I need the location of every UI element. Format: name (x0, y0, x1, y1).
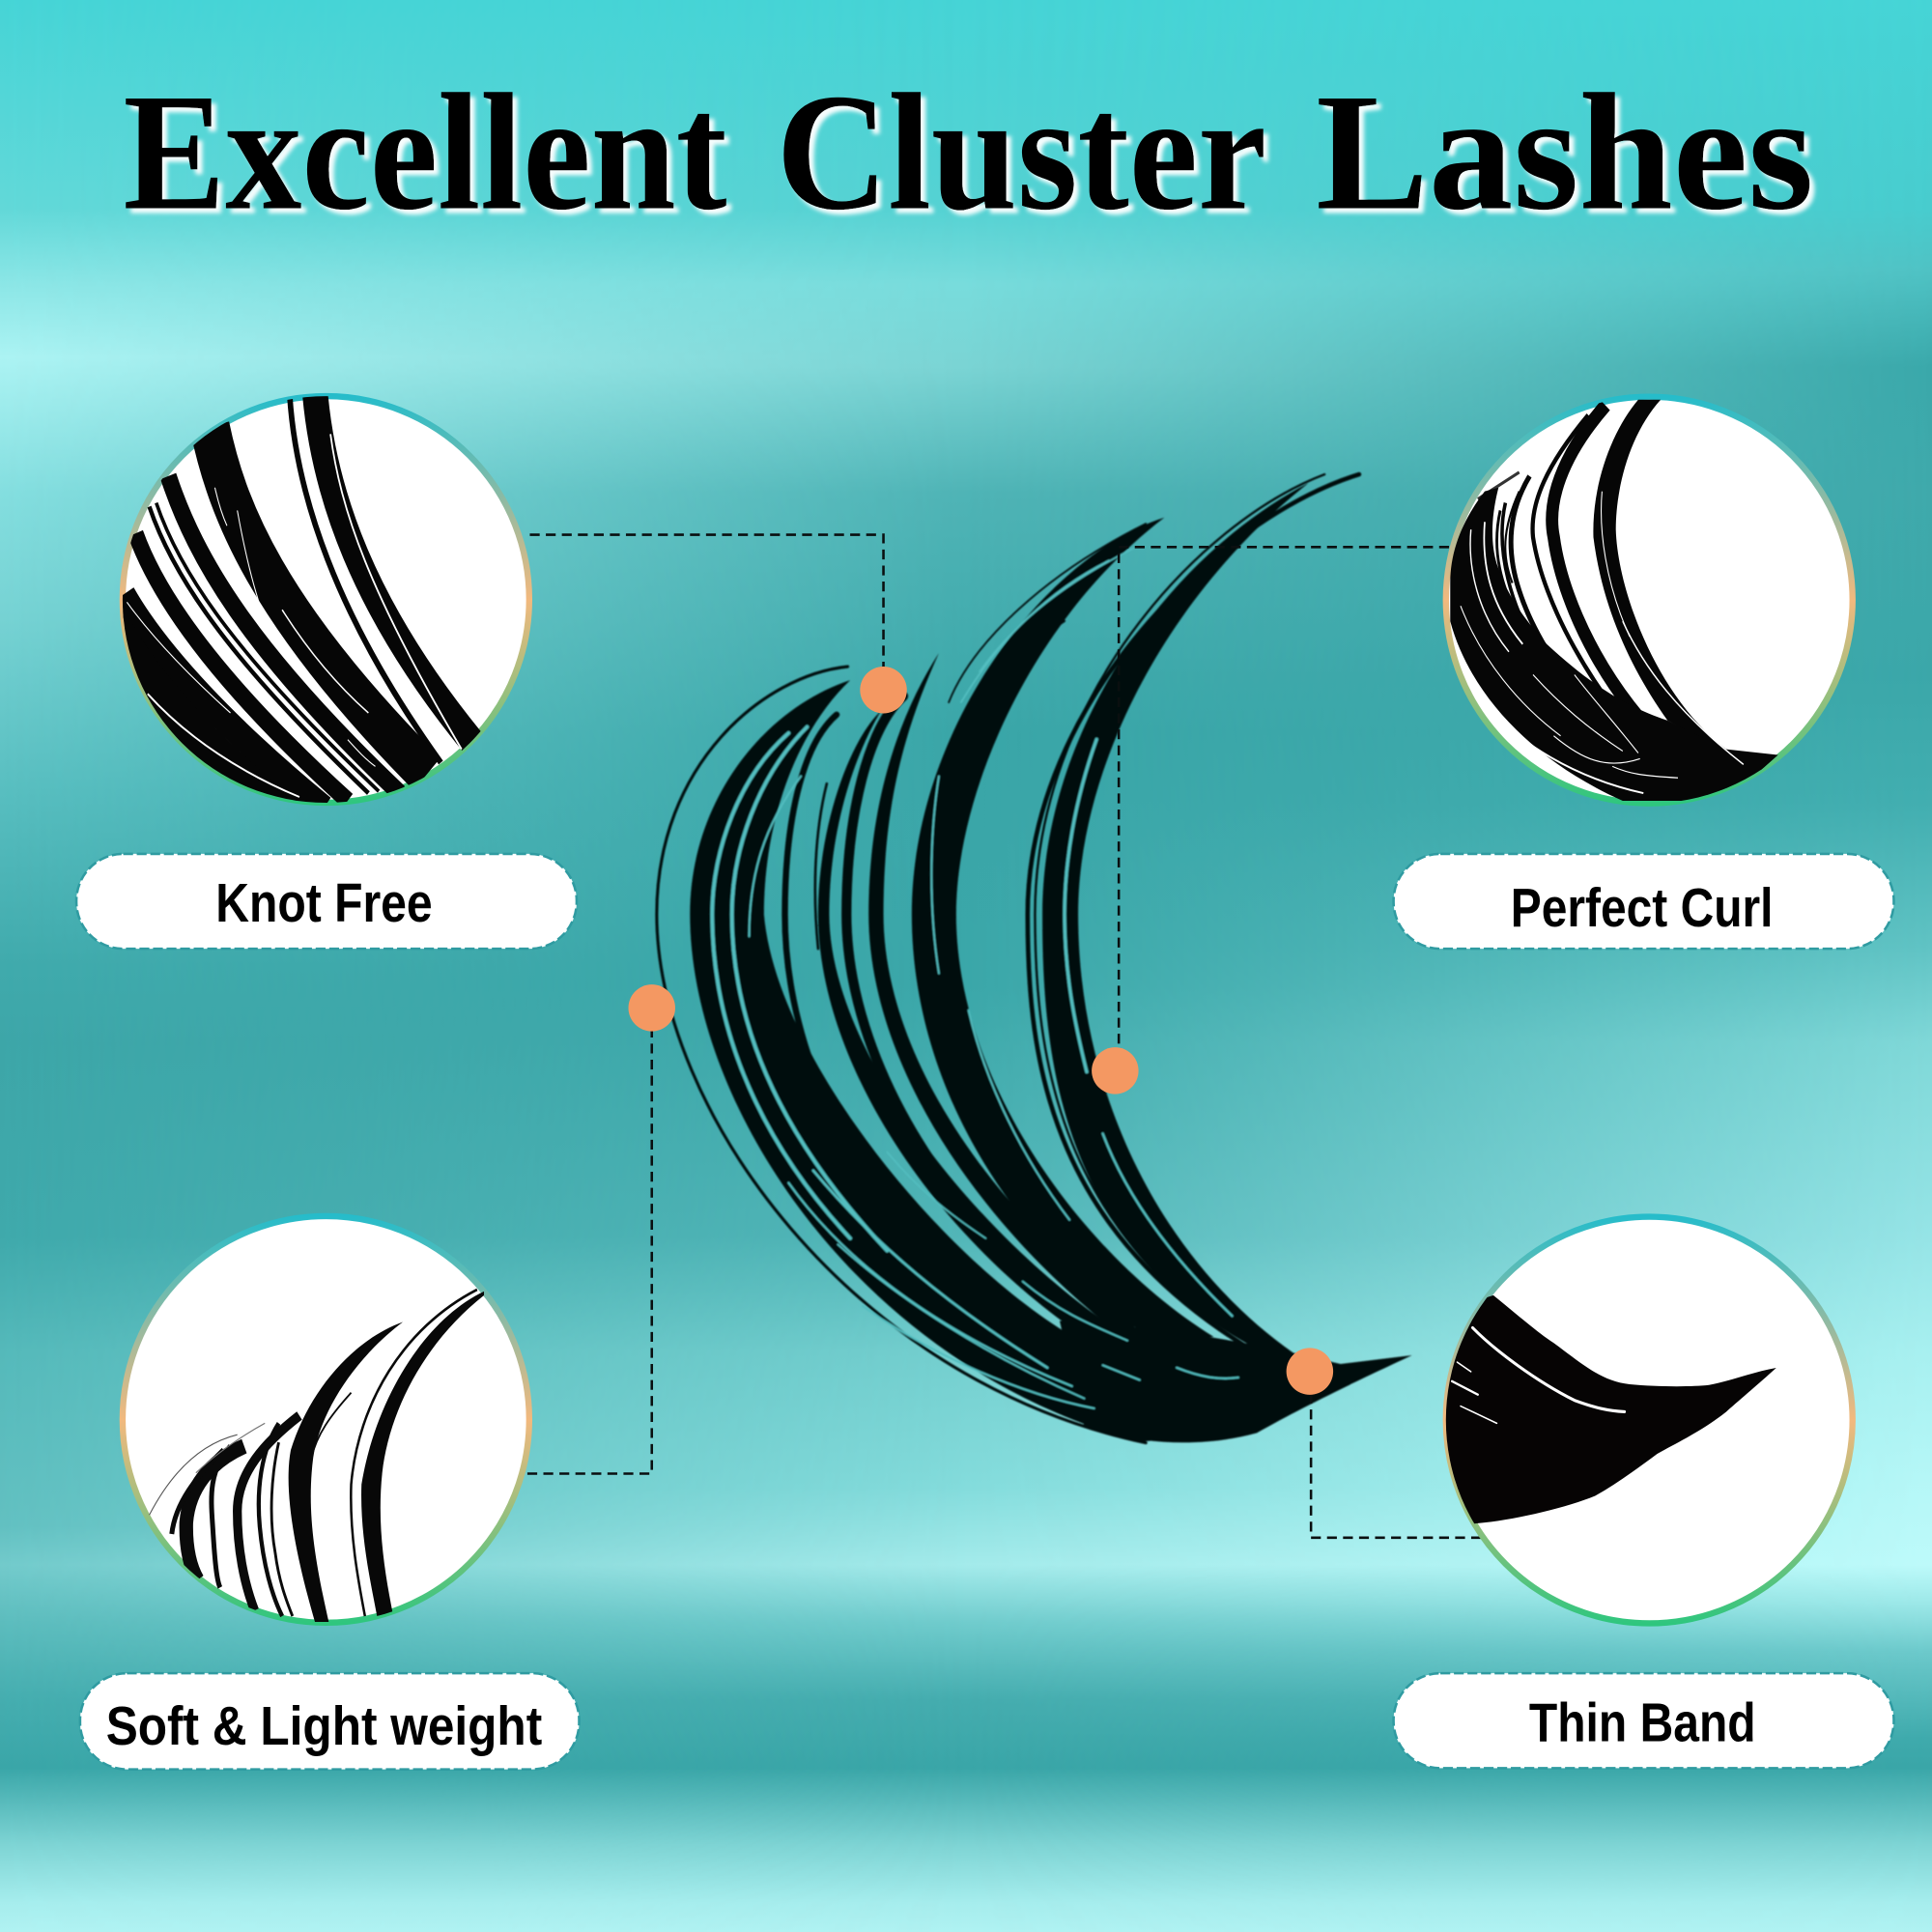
marker dot: right (1092, 1047, 1139, 1094)
panel: knot free closeup (117, 392, 529, 809)
lash strand group: inner crescent one (818, 711, 1109, 1337)
lash band base (1060, 1321, 1412, 1442)
connector: perfect curl (1119, 547, 1449, 1054)
connector: knot free (529, 535, 884, 671)
label: perfect curl (1394, 854, 1893, 949)
panel: perfect curl closeup (1446, 397, 1853, 804)
label: knot free: Knot Free (215, 872, 433, 933)
label: thin band (1394, 1673, 1893, 1768)
central lash cluster (657, 474, 1412, 1443)
connector: thin band (1311, 1392, 1481, 1538)
label: thin band: Thin Band (1529, 1691, 1756, 1752)
title: Cluster (777, 59, 1266, 245)
lash strand group: inner crescent three (868, 653, 1146, 1331)
marker dot: left (629, 984, 675, 1032)
marker dot: base (1287, 1348, 1333, 1395)
lash strand group: middle crescent (912, 518, 1213, 1343)
label: perfect curl: Perfect Curl (1511, 877, 1773, 938)
title: Lashes (1316, 59, 1814, 245)
lash strand group: left dense mass (690, 680, 1293, 1441)
label: soft and light weight (80, 1673, 579, 1770)
connector: soft and light weight (527, 1029, 652, 1474)
teal gaps between strands (712, 549, 1238, 1408)
label: soft and light weight: Soft & Light weight (106, 1695, 542, 1756)
thin strands (657, 474, 1359, 1443)
panel: soft and light weight closeup (123, 1216, 529, 1623)
title (124, 59, 1814, 245)
lash strand group: right crescent (1042, 483, 1309, 1361)
label: knot free (76, 854, 577, 949)
marker dot: top (860, 667, 907, 714)
panel: thin band closeup (1440, 1217, 1853, 1623)
title: Excellent (124, 59, 727, 245)
